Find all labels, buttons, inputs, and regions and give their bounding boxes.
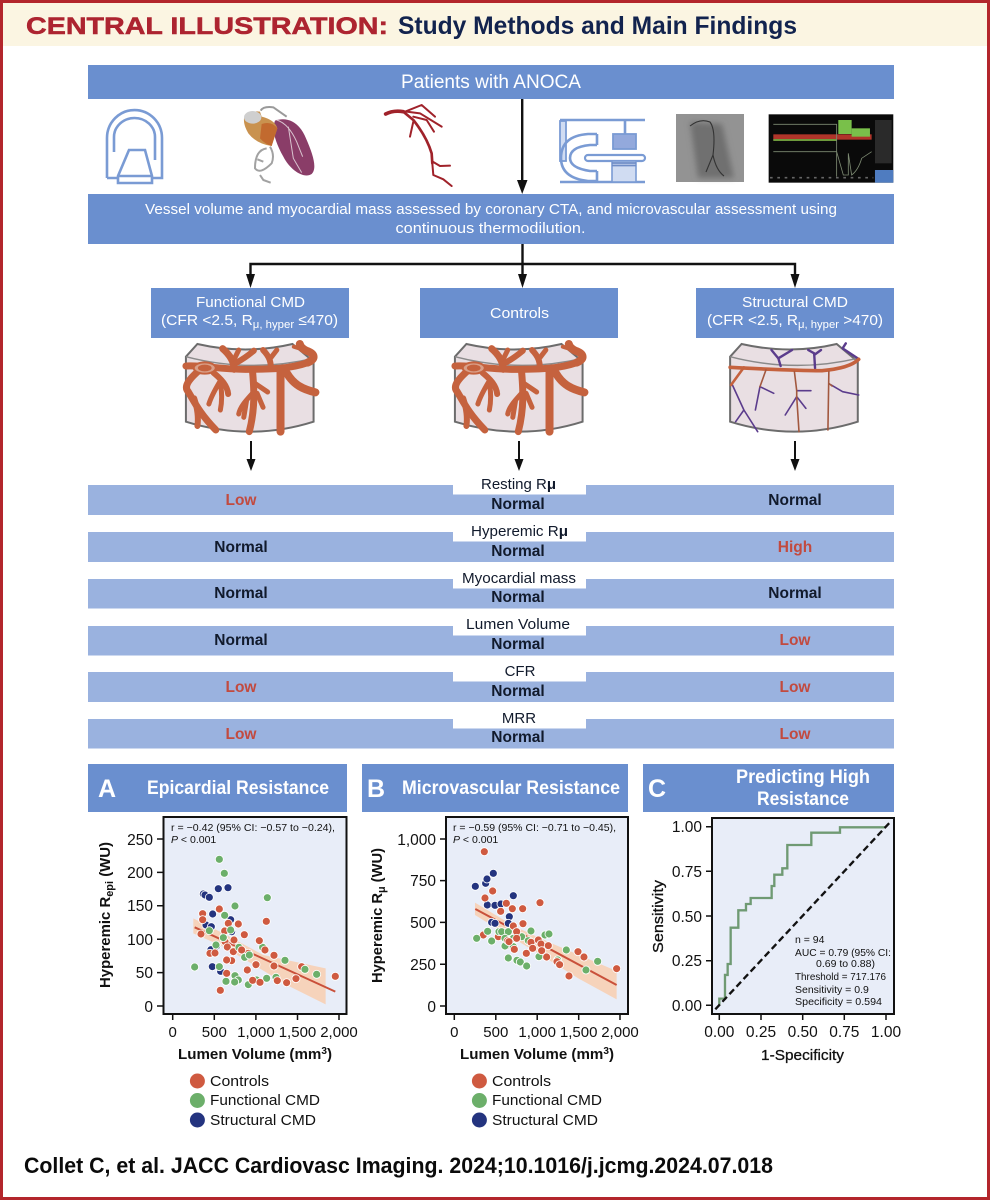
- result row: MRR: [88, 709, 894, 748]
- axes A: 0: [169, 1024, 177, 1041]
- arrow: patients to assessment: [517, 99, 528, 194]
- result row: resting Rμ: Low: [226, 492, 257, 509]
- legend A: Structural CMD: [210, 1112, 316, 1129]
- box: functional CMD: Functional CMD: [196, 294, 305, 311]
- panel header B: microvascular resistance: [362, 764, 628, 812]
- ROC statistics: n = 94: [795, 934, 825, 946]
- axes A: 500: [202, 1024, 227, 1041]
- axes C: 0.75: [672, 864, 702, 881]
- axes C: 0.50: [788, 1024, 818, 1041]
- axes B: 250: [410, 957, 436, 974]
- annotation: correlation B: r = −0.59 (95% CI: −0.71 to −0.45),: [453, 822, 616, 834]
- axes B: Hyperemic R: [369, 891, 386, 983]
- result row: resting Rμ: [88, 475, 894, 515]
- icon: heart CT render: [244, 107, 314, 183]
- axes A: 2,000: [320, 1024, 358, 1041]
- reference diagonal: [715, 822, 890, 1009]
- result row: myocardial mass: Normal: [768, 585, 822, 602]
- result row: hyperemic Rμ: High: [778, 539, 812, 556]
- legend A: Functional CMD: [210, 1092, 320, 1109]
- axes B: 3: [603, 1046, 609, 1057]
- axes A: Hyperemic R: [97, 896, 114, 988]
- chart C: ROC curve: [650, 818, 901, 1064]
- result row: CFR: CFR: [505, 663, 536, 680]
- axes C: 0.25: [746, 1024, 776, 1041]
- box: functional CMD: μ, hyper: [253, 319, 294, 331]
- axes C: [650, 819, 901, 1064]
- axes A: 250: [127, 832, 153, 849]
- panel header C: predicting high resistance: Predicting High: [736, 767, 870, 788]
- icon: coronary tree: [386, 105, 452, 186]
- result row: CFR: Low: [780, 679, 811, 696]
- legend B: Controls: [492, 1073, 551, 1090]
- panel header A: epicardial resistance: A: [98, 775, 116, 803]
- ROC statistics: [795, 934, 891, 1008]
- panel header C: predicting high resistance: [643, 764, 894, 812]
- result row: hyperemic Rμ: Normal: [214, 539, 268, 556]
- legend B: Functional CMD: [492, 1092, 602, 1109]
- result row: hyperemic Rμ: [88, 522, 894, 562]
- axes B: 500: [410, 915, 436, 932]
- axes A: 1,000: [237, 1024, 275, 1041]
- icon: CT scanner: [107, 110, 162, 183]
- axes C: 0.75: [829, 1024, 859, 1041]
- arrows: branching to three groups: [246, 244, 800, 288]
- result row: MRR: Low: [226, 726, 257, 743]
- illustration: control vessels: [455, 344, 584, 432]
- axes B: Lumen Volume (mm: [460, 1046, 602, 1063]
- ROC statistics: Specificity = 0.594: [795, 996, 882, 1008]
- box: controls: [420, 288, 618, 338]
- annotation: correlation A: r = −0.42 (95% CI: −0.57 to −0.24),: [171, 822, 335, 834]
- axes A: 3: [321, 1046, 327, 1057]
- banner: vessel volume and microvascular assessment: [88, 194, 894, 244]
- axes B: 0: [450, 1024, 458, 1041]
- confidence band and regression B: [475, 903, 617, 999]
- title: Study Methods and Main Findings: [398, 12, 797, 40]
- data points A: [191, 855, 339, 994]
- title: [26, 12, 797, 40]
- citation: Collet C, et al. JACC Cardiovasc Imaging. 2024;10.1016/j.jcmg.2024.07.018: [24, 1153, 773, 1178]
- axes C: 0.00: [704, 1024, 735, 1041]
- panel header A: epicardial resistance: Epicardial Resistance: [147, 778, 329, 799]
- axes C: Sensitivity: [650, 879, 667, 953]
- box: functional CMD: [151, 288, 349, 338]
- ROC statistics: Sensitivity = 0.9: [795, 984, 869, 996]
- axes A: (WU): [97, 842, 114, 881]
- panel header B: microvascular resistance: B: [367, 775, 385, 803]
- axes B: 1,500: [560, 1024, 597, 1041]
- axes A: 200: [127, 865, 153, 882]
- result row: lumen volume: Normal: [214, 632, 268, 649]
- axes A: epi: [104, 881, 116, 897]
- result row: lumen volume: Low: [780, 632, 811, 649]
- result row: lumen volume: [88, 616, 894, 656]
- result row: CFR: Low: [226, 679, 257, 696]
- box: structural CMD: [696, 288, 894, 338]
- axes A: 1,500: [279, 1024, 316, 1041]
- box: controls: Controls: [490, 305, 549, 322]
- result row: MRR: Normal: [491, 729, 545, 746]
- result row: resting Rμ: Resting Rμ: [481, 476, 556, 493]
- result row: resting Rμ: Normal: [491, 496, 545, 513]
- axes A: ): [327, 1046, 332, 1063]
- result row: hyperemic Rμ: Hyperemic Rμ: [471, 523, 568, 540]
- box: structural CMD: (CFR <2.5, R: [707, 312, 796, 329]
- axes B: ): [609, 1046, 614, 1063]
- annotation: correlation A: P < 0.001: [171, 834, 216, 846]
- chart B: microvascular resistance scatter: [369, 817, 639, 1063]
- axes B: (WU): [369, 848, 386, 886]
- box: structural CMD: >470): [839, 312, 883, 329]
- axes C: 1.00: [672, 819, 702, 836]
- data points B: [471, 848, 621, 980]
- axes B: 1,000: [397, 832, 436, 849]
- axes B: 2,000: [601, 1024, 639, 1041]
- chart A: epicardial resistance scatter: [97, 817, 358, 1063]
- legend A: Controls: [210, 1073, 269, 1090]
- banner: patients with ANOCA: [88, 65, 894, 99]
- result row: myocardial mass: [88, 569, 894, 608]
- box: functional CMD: ≤470): [294, 312, 338, 329]
- banner: vessel volume and microvascular assessment: continuous thermodilution.: [396, 220, 586, 237]
- box: structural CMD: Structural CMD: [742, 294, 848, 311]
- header band: [2, 2, 988, 46]
- result row: MRR: Low: [780, 726, 811, 743]
- ROC step curve: [719, 827, 886, 1005]
- axes A: 50: [136, 965, 153, 982]
- axes B: 750: [410, 873, 436, 890]
- icon: cath lab C-arm: [560, 120, 645, 182]
- axes B: 1,000: [518, 1024, 556, 1041]
- illustration: structural CMD vessels: [730, 343, 859, 432]
- panel header C: predicting high resistance: Resistance: [757, 789, 849, 810]
- result row: CFR: [88, 662, 894, 702]
- result row: myocardial mass: Myocardial mass: [462, 570, 576, 587]
- axes B: [369, 832, 639, 1063]
- image: thermodilution monitor: [769, 114, 893, 183]
- confidence band and regression A: [193, 918, 335, 1004]
- axes C: 0.00: [672, 998, 702, 1015]
- result row: myocardial mass: Normal: [214, 585, 268, 602]
- arrows: groups to results: [246, 441, 800, 471]
- annotation: correlation B: P < 0.001: [453, 834, 498, 846]
- ROC statistics: Threshold = 717.176: [795, 971, 886, 983]
- axes C: 0.50: [672, 909, 702, 926]
- axes A: 0: [144, 999, 153, 1016]
- axes A: Lumen Volume (mm: [178, 1046, 320, 1063]
- ROC statistics: 0.69 to 0.88): [816, 958, 875, 970]
- result row: hyperemic Rμ: Normal: [491, 543, 545, 560]
- banner: vessel volume and microvascular assessment: Vessel volume and myocardial mass assessed by coronary CTA, and microvascular assessment using: [145, 201, 837, 218]
- illustration: functional CMD vessels: [186, 344, 315, 432]
- axes B: 0: [427, 999, 436, 1016]
- legend B: [472, 1073, 602, 1129]
- title: CENTRAL ILLUSTRATION:: [26, 13, 388, 40]
- axes B: μ: [376, 886, 388, 893]
- result row: CFR: Normal: [491, 683, 545, 700]
- legend B: Structural CMD: [492, 1112, 598, 1129]
- result row: lumen volume: Lumen Volume: [466, 616, 570, 633]
- axes C: 1.00: [871, 1024, 901, 1041]
- axes C: 1-Specificity: [761, 1047, 845, 1064]
- box: functional CMD: (CFR <2.5, R: [161, 312, 250, 329]
- axes A: 100: [127, 932, 153, 949]
- legend A: [190, 1073, 320, 1129]
- box: structural CMD: μ, hyper: [798, 319, 839, 331]
- axes A: 150: [127, 898, 153, 915]
- panel header B: microvascular resistance: Microvascular Resistance: [402, 778, 620, 799]
- result row: myocardial mass: Normal: [491, 589, 545, 606]
- axes A: [97, 832, 358, 1063]
- result row: MRR: MRR: [502, 710, 536, 727]
- image: coronary angiogram: [676, 114, 744, 182]
- panel header C: predicting high resistance: C: [648, 775, 666, 803]
- result row: resting Rμ: Normal: [768, 492, 822, 509]
- axes C: 0.25: [672, 953, 702, 970]
- ROC statistics: AUC = 0.79 (95% CI:: [795, 947, 891, 959]
- panel header A: epicardial resistance: [88, 764, 347, 812]
- banner: patients with ANOCA: Patients with ANOCA: [401, 72, 581, 93]
- result row: lumen volume: Normal: [491, 636, 545, 653]
- axes B: 500: [483, 1024, 508, 1041]
